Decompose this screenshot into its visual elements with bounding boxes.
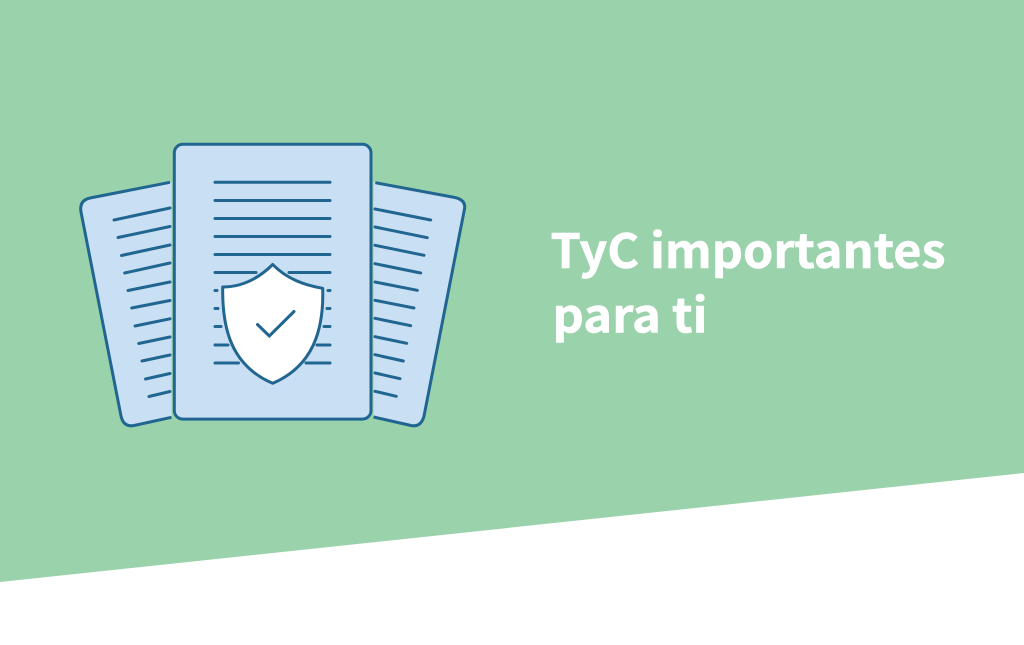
right back page: [374, 182, 465, 426]
title: TyC importantes: [550, 213, 946, 282]
title: para ti: [552, 278, 708, 346]
front page: [174, 144, 371, 419]
icon: documents with shield: [81, 144, 465, 426]
left back page: [81, 182, 172, 426]
icon: shield with check mark: [223, 264, 323, 383]
